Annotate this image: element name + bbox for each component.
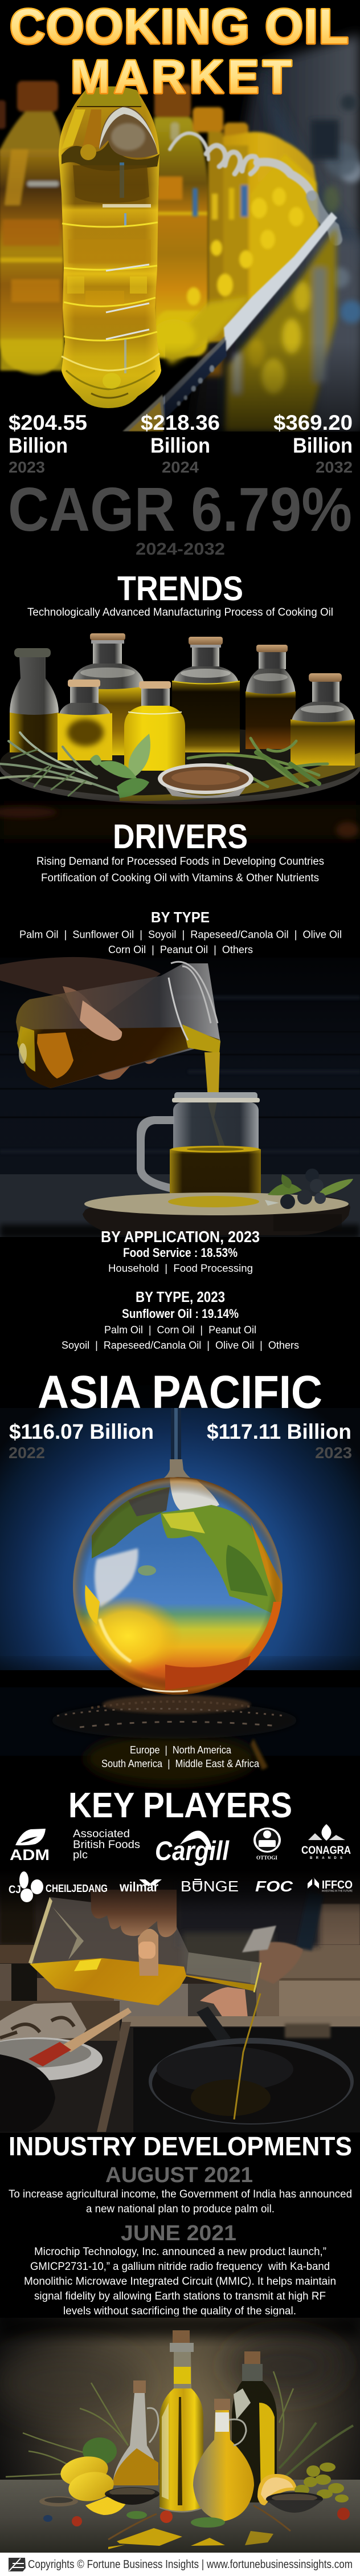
- bottle: dark large: [172, 637, 240, 752]
- august 2021 entry: a new national plan to produce palm oil.: [86, 2203, 275, 2215]
- june 2021 entry: JUNE 2021: [121, 2221, 236, 2245]
- tomatoes and leaves on table: [43, 2505, 350, 2540]
- backdrop with wood planks: [0, 958, 360, 1238]
- right dark bottle: [232, 2351, 277, 2502]
- logo: IFFCO: [308, 1877, 353, 1893]
- second blurred bottle: [154, 84, 208, 358]
- olives: [294, 2463, 349, 2502]
- blue backdrop: [0, 1351, 360, 1756]
- logo: IFFCO: IFFCO: [322, 1879, 353, 1891]
- footer: [0, 2553, 360, 2576]
- hero bottom fade: [165, 342, 360, 432]
- market value 2023: 2023: [9, 458, 45, 476]
- by type 2023 values: Sunflower Oil : 19.14%: [122, 1307, 239, 1321]
- by application heading: BY APPLICATION, 2023: [101, 1228, 260, 1246]
- drivers faint backdrop: [0, 805, 360, 839]
- june 2021 entry: signal fidelity by allowing Earth stations to transmit at high RF: [34, 2290, 326, 2302]
- drivers heading: DRIVERS: [113, 817, 248, 856]
- asia pacific heading: ASIA PACIFIC: [38, 1366, 322, 1418]
- by application values: [108, 1246, 253, 1274]
- row of receding bottles: [193, 107, 319, 342]
- logo: Conagra Brands: BRANDS: [310, 1857, 342, 1860]
- main sharp bottle: [59, 87, 161, 408]
- tall centre bottle: [159, 2330, 203, 2513]
- by type heading: BY TYPE: [151, 909, 210, 926]
- basil leaves: [90, 734, 150, 798]
- white reflection: [95, 1548, 138, 1608]
- asia pacific value 2022: $116.07 Billion: [9, 1420, 154, 1443]
- hand on bottle: [91, 1890, 177, 1976]
- pouring photo: oil poured from a carafe into a jar: [0, 957, 360, 1238]
- room backdrop: [0, 1884, 360, 2016]
- bottle: right dark: [246, 645, 296, 749]
- oil puddles: [108, 2528, 273, 2549]
- dish and spatula: [0, 2008, 132, 2081]
- bottle: far right: [291, 673, 355, 766]
- by type 2023 values: Soyoil | Rapeseed/Canola Oil | Olive Oil | Others: [62, 1339, 299, 1351]
- by type list: [19, 928, 342, 955]
- counter and stove: [0, 2016, 360, 2135]
- spice bowls: [39, 2487, 323, 2513]
- glow yellow: [80, 1597, 177, 1673]
- CAGR headline: 2024-2032: [136, 540, 225, 559]
- logo: ADM: ADM: [10, 1846, 50, 1863]
- white reflections along the bottle row: [170, 133, 336, 239]
- june 2021 entry: Monolithic Microwave Integrated Circuit (MMIC). It helps maintain: [24, 2276, 336, 2288]
- asia pacific value 2022: 2022: [9, 1444, 45, 1462]
- trends heading: TRENDS: [117, 569, 243, 608]
- market value 2032: [273, 411, 353, 476]
- tray: [0, 727, 360, 804]
- title line 1: COOKING OIL: [10, 0, 349, 54]
- asia pacific value 2023: $117.11 Billion: [207, 1420, 351, 1443]
- market value 2032: Billion: [293, 434, 353, 457]
- bottle: large back: [70, 633, 145, 755]
- market value 2032: $369.20: [273, 411, 353, 434]
- logo: CJ CheilJedang: CHEILJEDANG: [46, 1883, 108, 1894]
- herb sprigs: [6, 2371, 353, 2477]
- logo: Wilmar: wilmar: [119, 1879, 158, 1894]
- herbs left: [0, 732, 120, 796]
- land: left: [92, 1487, 170, 1558]
- hand: [0, 957, 161, 1080]
- globe sphere: [73, 1476, 283, 1695]
- logo: FOC: FOC: [255, 1878, 293, 1895]
- june 2021 entry: Microchip Technology, Inc. announced a new product launch,”: [34, 2246, 326, 2258]
- black lid: [0, 2054, 55, 2132]
- logo: Cargill: Cargill: [155, 1836, 230, 1866]
- by type 2023 values: Palm Oil | Corn Oil | Peanut Oil: [104, 1324, 256, 1336]
- shelf label strip: [122, 212, 337, 432]
- title line 2: MARKET: [71, 50, 292, 103]
- basil behind lemons: [83, 2437, 117, 2465]
- glass bottle with oil: [28, 1897, 261, 2005]
- logo: CJ CheilJedang: CJ: [9, 1884, 21, 1896]
- market value 2032: 2032: [316, 458, 353, 476]
- herbs right: [188, 738, 328, 787]
- by type list: Palm Oil | Sunflower Oil | Soyoil | Rapeseed/Canola Oil | Olive Oil: [19, 928, 342, 941]
- logo: Associated British Foods plc: [73, 1828, 140, 1861]
- logo: Associated British Foods plc: British Foods: [73, 1839, 140, 1851]
- still life photo: oil bottles, lemons, olives: [0, 2314, 360, 2555]
- logo: Bunge: BUNGE: [181, 1878, 239, 1895]
- market value 2023: Billion: [9, 434, 68, 457]
- bottle: left clear: [10, 648, 59, 752]
- by application values: Food Service : 18.53%: [123, 1246, 238, 1260]
- other regions list: South America | Middle East & Africa: [101, 1757, 260, 1769]
- oil stream into pan: [234, 1993, 260, 2119]
- white polar highlight: [170, 1476, 219, 1513]
- key players heading: KEY PLAYERS: [68, 1786, 292, 1825]
- trends photo: glass bottles of oil on a tray with herbs: [0, 633, 360, 804]
- market value 2024: [141, 411, 220, 476]
- logo: CJ CheilJedang: [9, 1871, 108, 1902]
- table surface: [0, 2480, 360, 2555]
- june 2021 entry: [24, 2221, 336, 2317]
- asia pacific value 2023: [207, 1420, 352, 1462]
- asia pacific value 2023: 2023: [315, 1444, 352, 1462]
- by type 2023 values: [62, 1307, 299, 1351]
- other regions list: [101, 1744, 260, 1769]
- bottle: yellow front: [124, 681, 185, 771]
- hero photo: oil bottles on a supermarket shelf: [0, 0, 360, 432]
- industry developments heading: INDUSTRY DEVELOPMENTS: [9, 2131, 352, 2161]
- logo: IFFCO: INVESTING IN THE FUTURE: [322, 1889, 353, 1893]
- carafe left: [113, 2380, 158, 2485]
- logo: Associated British Foods plc: plc: [73, 1849, 88, 1861]
- right arm and cloth: [242, 1926, 303, 1984]
- trends description: Technologically Advanced Manufacturing Process of Cooking Oil: [27, 606, 333, 618]
- drivers text: Fortification of Cooking Oil with Vitamins & Other Nutrients: [41, 872, 319, 884]
- globe photo: oil drop forming the Earth: [0, 1408, 360, 1788]
- drivers text: [36, 855, 324, 884]
- market value 2024: Billion: [150, 434, 210, 457]
- market value 2024: $218.36: [141, 411, 220, 434]
- logo: Ottogi: [253, 1828, 281, 1861]
- by application values: Household | Food Processing: [108, 1262, 253, 1274]
- market value 2023: $204.55: [9, 411, 87, 434]
- round flask: [193, 2399, 254, 2521]
- mushrooms: [0, 2001, 120, 2041]
- lower hand: [200, 1987, 248, 2016]
- logo: Conagra Brands: CONAGRA: [301, 1845, 351, 1857]
- right shelf background: [188, 34, 360, 432]
- logo: Associated British Foods plc: Associated: [73, 1828, 130, 1840]
- august 2021 entry: To increase agricultural income, the Government of India has announced: [9, 2188, 352, 2200]
- frying pan: [149, 2007, 354, 2125]
- drivers text: Rising Demand for Processed Foods in Developing Countries: [36, 855, 324, 868]
- kitchen photo: pouring oil into a frying pan: [0, 1870, 360, 2135]
- other regions list: Europe | North America: [130, 1744, 232, 1756]
- june 2021 entry: levels without sacrificing the quality of the signal.: [63, 2305, 296, 2317]
- logo: ADM: [10, 1829, 50, 1863]
- olives and leaves: [265, 1169, 353, 1209]
- jar: [137, 1092, 261, 1213]
- bottle: small yellow left: [58, 679, 112, 760]
- top fade: [0, 1870, 360, 1928]
- by type list: Corn Oil | Peanut Oil | Others: [108, 943, 253, 955]
- bowl of dried herbs: [158, 763, 253, 798]
- carafe: [16, 962, 220, 1088]
- asia pacific value 2022: [9, 1420, 154, 1462]
- oil stream above globe: [157, 1408, 199, 1482]
- lemons: [58, 2453, 297, 2515]
- june 2021 entry: GMICP2731-10,” a gallium nitride radio frequency with Ka-band: [30, 2261, 330, 2273]
- bokeh highlights on the bottle row: [187, 188, 304, 306]
- august 2021 entry: [9, 2163, 352, 2215]
- footer logo: [9, 2558, 26, 2571]
- land: right: [161, 1505, 283, 1619]
- market value 2024: 2024: [162, 458, 199, 476]
- market value 2023: [9, 411, 87, 476]
- left blurred bottle: [0, 81, 64, 375]
- by type 2023 heading: BY TYPE, 2023: [136, 1288, 225, 1305]
- rim glow: [73, 1477, 283, 1695]
- august 2021 entry: AUGUST 2021: [105, 2163, 253, 2187]
- logo: Conagra Brands: [301, 1824, 351, 1860]
- oil splash below globe: [52, 1695, 297, 1784]
- wooden slab: [83, 1193, 350, 1235]
- logo: Ottogi: OTTOGI: [256, 1855, 277, 1861]
- dark smoky backdrop: [0, 2314, 360, 2480]
- oil stream: [204, 1052, 226, 1148]
- lower receding bottles: [152, 228, 336, 432]
